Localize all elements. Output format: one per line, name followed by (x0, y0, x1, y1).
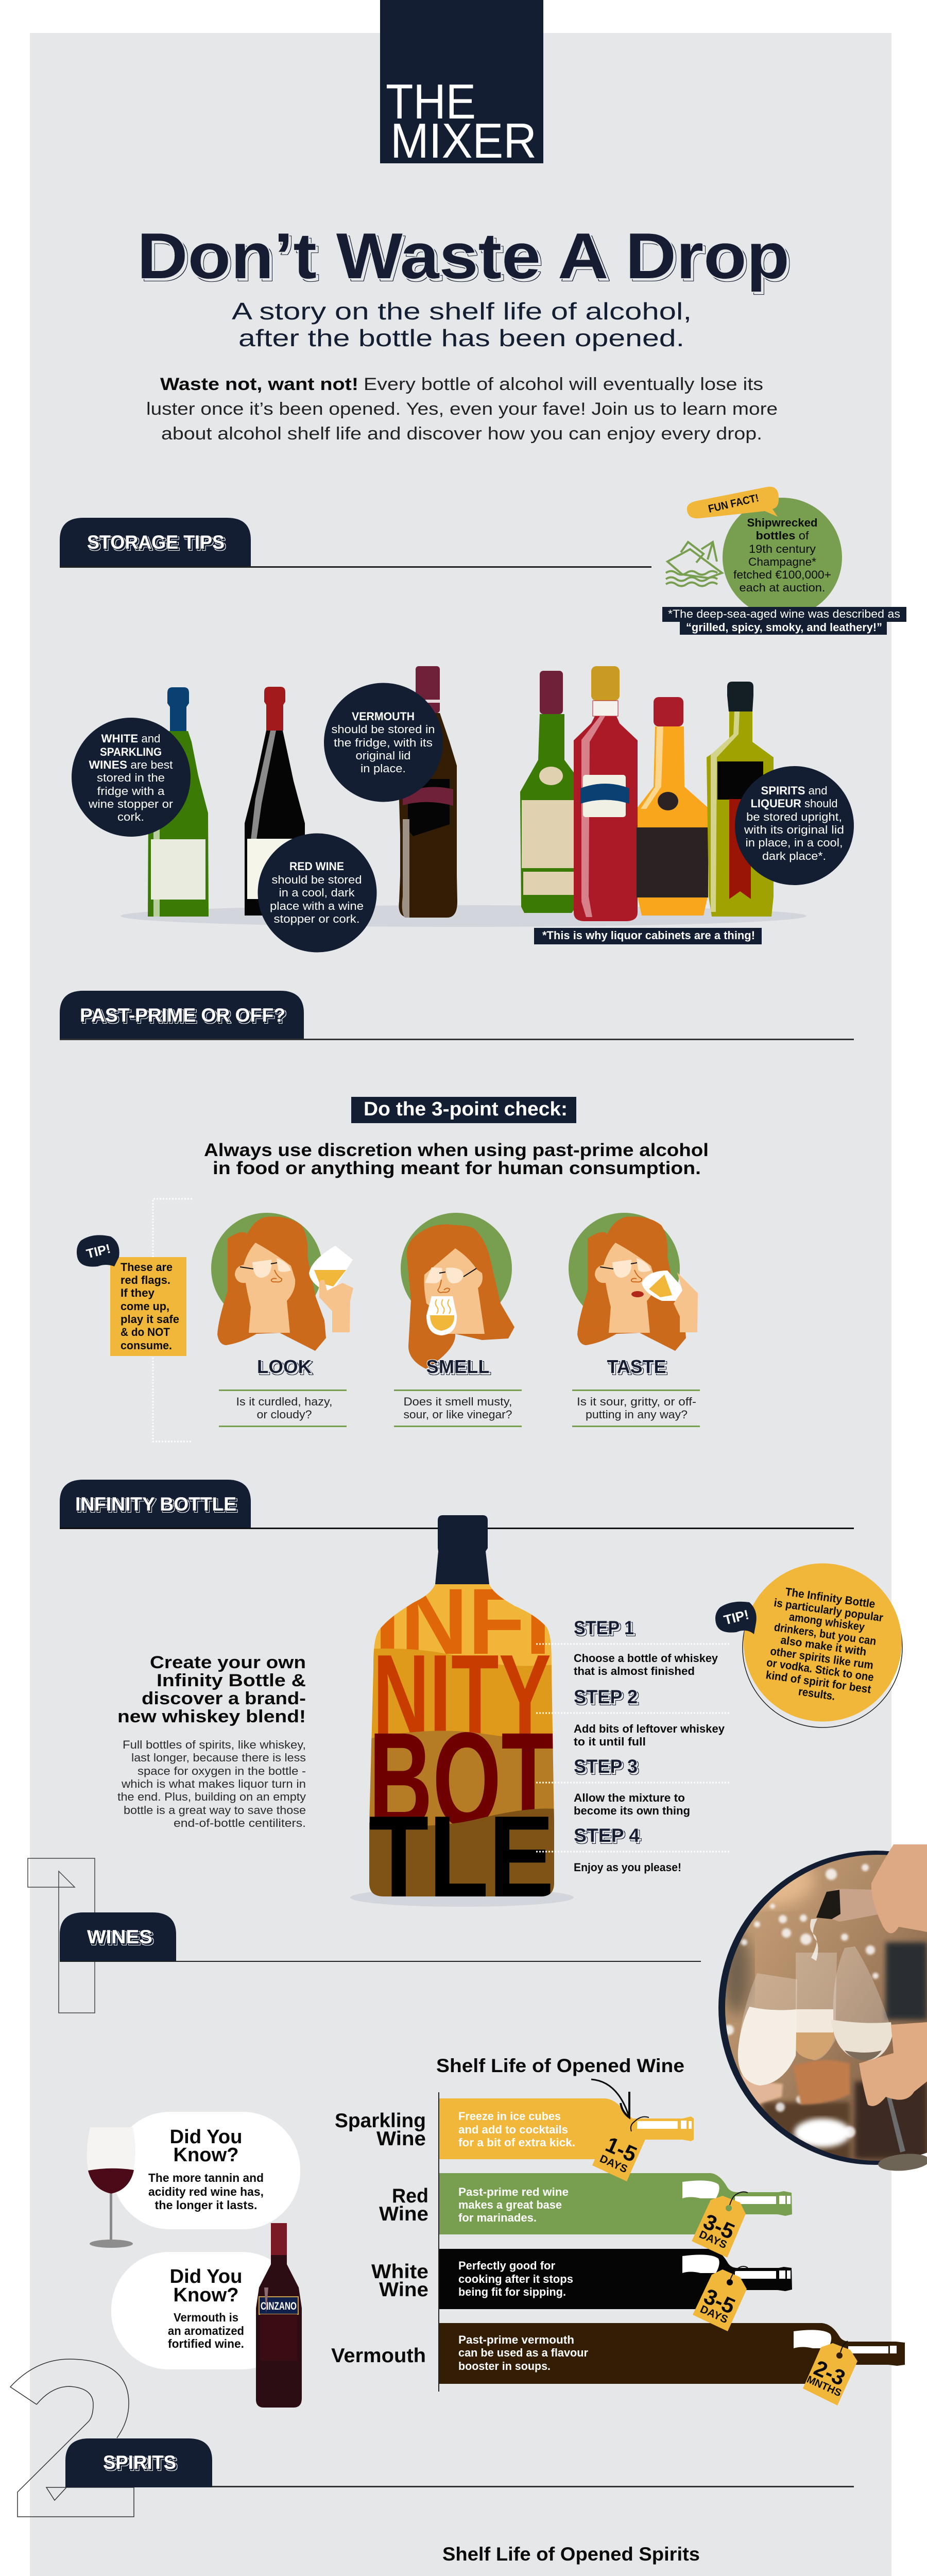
callout: vermouth: in place. (360, 762, 406, 775)
text: discretion note: Always use discretion when using past-prime alcohol (204, 1140, 709, 1160)
did you know: vermouth: Did You (170, 2266, 242, 2287)
text: create your own infinity bottle: space for oxygen in the bottle - (138, 1765, 306, 1777)
text: create your own infinity bottle: end-of-bottle centiliters. (174, 1817, 306, 1829)
check: smell: SMELL (426, 1356, 489, 1377)
tip circle: infinity bottle: or vodka. Stick to one (766, 1656, 874, 1684)
subtitle: A story on the shelf life of alcohol, (232, 298, 692, 325)
tip circle: infinity bottle (715, 1563, 902, 1727)
bottle shadow (350, 1888, 574, 1907)
section tab: infinity bottle (60, 1480, 854, 1529)
fun fact text: Champagne* (748, 555, 816, 568)
did you know: vermouth: Vermouth is (174, 2311, 238, 2324)
callout: spirits and liqueur: SPIRITS and (761, 784, 827, 797)
check: taste: TASTE (607, 1356, 666, 1377)
did you know: tannin (87, 2112, 300, 2248)
callout: spirits and liqueur (735, 766, 854, 885)
callout: spirits and liqueur: LIQUEUR should (751, 797, 837, 810)
callout: spirits and liqueur: in place, in a cool, (746, 836, 843, 849)
check: look: LOOK (257, 1356, 312, 1377)
tag: red wine 3-5 days: 3-5 (700, 2209, 738, 2244)
step 3: become its own thing (574, 1804, 690, 1817)
bar: vermouth: can be used as a flavour (458, 2346, 588, 2359)
tag: vermouth 2-3 months: MNTHS (805, 2374, 843, 2399)
callout: white and sparkling wines: cork. (117, 810, 144, 823)
bottle: orange liqueur (637, 697, 708, 916)
tip box: red flags: red flags. (121, 1274, 170, 1286)
bottle: white wine (148, 687, 209, 917)
section tab: spirits (65, 2438, 854, 2487)
bar: red wine (379, 2173, 792, 2234)
arrow: to sparkling tag (591, 2079, 629, 2117)
check: taste (572, 1356, 700, 1427)
hand: top right with bottle (816, 1844, 927, 1933)
text: create your own infinity bottle: the end. Plus, building on an empty (117, 1790, 306, 1803)
step 1: Choose a bottle of whiskey (574, 1652, 718, 1665)
text: create your own infinity bottle: discover a brand- (142, 1689, 306, 1708)
chart title: wine: Shelf Life of Opened Wine (436, 2055, 684, 2076)
bottle: red wine (245, 687, 305, 916)
text: create your own infinity bottle: Infinity Bottle & (157, 1671, 306, 1690)
tip box: red flags (77, 1235, 186, 1356)
callout: vermouth (324, 683, 443, 802)
intro paragraph (146, 375, 778, 444)
step 1: that is almost finished (574, 1665, 695, 1677)
callout: spirits and liqueur: be stored upright, (746, 810, 842, 823)
did you know: tannin: the longer it lasts. (154, 2198, 258, 2212)
green circle (723, 498, 842, 617)
check: taste: putting in any way? (586, 1408, 688, 1421)
did you know: vermouth: Know? (173, 2284, 239, 2306)
bubble: tip (715, 1602, 757, 1634)
check: smell: sour, or like vinegar? (404, 1408, 512, 1421)
bottle: green liqueur (520, 671, 577, 913)
check: smell: Does it smell musty, (404, 1395, 512, 1408)
callout: red wine: should be stored (272, 873, 362, 886)
illustration: taste (569, 1213, 698, 1351)
logo: The Mixer: THE (386, 74, 476, 129)
logo: The Mixer: MIXER (390, 113, 537, 168)
illustration: infinity bottle: NITY (373, 1630, 551, 1760)
did you know: tannin: Did You (170, 2126, 242, 2148)
tag: white wine 3-5 days: 3-5 (700, 2284, 739, 2318)
check: look (219, 1356, 347, 1427)
bar: sparkling wine: Wine (376, 2128, 426, 2150)
bottle: red liqueur (574, 666, 638, 921)
bar: white wine: Wine (379, 2279, 428, 2301)
tip box: red flags: If they (121, 1286, 155, 1299)
callout: vermouth: original lid (355, 749, 411, 762)
did you know: tannin: Know? (173, 2144, 239, 2166)
logo: The Mixer (380, 0, 543, 168)
step 4: Enjoy as you please! (574, 1861, 681, 1874)
bar: white wine: White (371, 2261, 428, 2283)
glass foot (878, 2152, 927, 2173)
bottle: olive liqueur (707, 682, 774, 917)
bottles shelf shadow (121, 905, 806, 927)
fun fact text: Shipwrecked (747, 516, 818, 529)
step 1: STEP 1 (574, 1617, 634, 1638)
bar: vermouth: Past-prime vermouth (458, 2333, 574, 2346)
did you know: vermouth (111, 2223, 302, 2408)
tip box: red flags: These are (121, 1261, 173, 1274)
hands (793, 2060, 850, 2105)
illustration: row of bottles (148, 666, 774, 921)
callout: vermouth: the fridge, with its (334, 736, 433, 749)
step 2: Add bits of leftover whiskey (574, 1722, 725, 1735)
intro paragraph: Waste not, want not! (160, 375, 358, 394)
bar: sparkling wine: and add to cocktails (458, 2123, 568, 2136)
tip box: red flags: & do NOT (121, 1326, 170, 1338)
callout: white and sparkling wines: WINES are best (89, 758, 173, 771)
callout: spirits and liqueur: dark place*. (762, 850, 826, 862)
tag: vermouth 2-3 months: 2-3 (811, 2355, 849, 2391)
pill: fun fact (687, 487, 779, 518)
check: smell (394, 1356, 522, 1427)
bar: sparkling wine: Freeze in ice cubes (458, 2110, 561, 2123)
callout: white and sparkling wines: fridge with a (97, 785, 165, 798)
check: look: or cloudy? (256, 1408, 312, 1421)
tag: white wine 3-5 days (693, 2266, 748, 2331)
text: create your own infinity bottle: last longer, because there is less (131, 1751, 306, 1764)
tip circle: infinity bottle: among whiskey (788, 1610, 866, 1634)
tag: vermouth 2-3 months (803, 2341, 857, 2405)
tip circle: infinity bottle: The Infinity Bottle (784, 1585, 876, 1611)
text: create your own infinity bottle: Create your own (150, 1653, 306, 1672)
step 3 (536, 1756, 729, 1817)
tag: red wine 3-5 days (692, 2192, 748, 2258)
text: create your own infinity bottle (117, 1653, 306, 1829)
text: create your own infinity bottle: bottle is a great way to save those (124, 1804, 306, 1817)
tip circle: infinity bottle: other spirits like rum (769, 1645, 874, 1672)
icon: cinzano bottle (256, 2223, 302, 2408)
section tab: wines (60, 1912, 701, 1962)
step 1 (536, 1617, 729, 1677)
decorative outline number two (10, 2359, 134, 2517)
did you know: tannin: acidity red wine has, (148, 2185, 264, 2198)
callout: white and sparkling wines: stored in the (97, 771, 165, 784)
bar: white wine (371, 2249, 792, 2309)
illustration: look (211, 1213, 353, 1351)
note: deep sea wine: “grilled, spicy, smoky, and leathery!” (686, 621, 882, 634)
bar: vermouth: booster in soups. (458, 2360, 551, 2372)
glass: middle (796, 1953, 837, 2060)
hand: right (859, 2022, 927, 2106)
illustration: infinity bottle: INFI (374, 1569, 551, 1674)
bar: sparkling wine (335, 2098, 694, 2159)
dotted bracket (153, 1199, 192, 1442)
glass: right (833, 1946, 889, 2023)
section tab: wines: WINES (87, 1926, 152, 1947)
bar: vermouth (331, 2323, 905, 2384)
callout: white and sparkling wines (72, 718, 191, 837)
note: deep sea wine (662, 607, 906, 635)
step 2: to it until full (574, 1735, 646, 1748)
pill: fun fact: FUN FACT! (707, 492, 760, 515)
section tab: spirits: SPIRITS (103, 2452, 176, 2473)
note: deep sea wine: *The deep-sea-aged wine was described as (668, 607, 900, 620)
decorative outline number one (28, 1858, 95, 2013)
tag: 1-5 days: 1-5 (602, 2132, 641, 2167)
step 2: STEP 2 (574, 1686, 638, 1707)
tip circle: infinity bottle: kind of spirit for best (765, 1668, 872, 1696)
intro paragraph: about alcohol shelf life and discover how you can enjoy every drop. (161, 424, 762, 444)
bar: red wine: makes a great base (458, 2198, 562, 2211)
tip box: red flags: play it safe (121, 1313, 179, 1326)
fun fact text: 19th century (749, 543, 816, 555)
text: create your own infinity bottle: which is what makes liquor turn in (121, 1777, 306, 1790)
bar: white wine: Perfectly good for (458, 2259, 555, 2272)
subtitle (232, 298, 692, 351)
tip circle: infinity bottle: results. (798, 1685, 836, 1703)
tag: 1-5 days (592, 2117, 649, 2181)
callout: red wine: place with a wine (270, 900, 364, 912)
step 2 (536, 1686, 729, 1748)
text: discretion note: in food or anything meant for human consumption. (213, 1158, 701, 1178)
step 4: STEP 4 (574, 1825, 640, 1846)
tip circle: infinity bottle: also make it with (780, 1633, 867, 1658)
callout: red wine: in a cool, dark (279, 886, 355, 899)
callout: red wine: stopper or cork. (274, 912, 359, 925)
callout: red wine (258, 834, 377, 952)
intro paragraph: luster once it’s been opened. Yes, even your fave! Join us to learn more (146, 399, 778, 419)
chart title: spirits: Shelf Life of Opened Spirits (442, 2544, 700, 2565)
section tab: past-prime or off: PAST-PRIME OR OFF? (80, 1005, 285, 1026)
callout: white and sparkling wines: WHITE and (101, 732, 161, 745)
callout: red wine: RED WINE (289, 860, 344, 873)
bar: white wine: being fit for sipping. (458, 2285, 566, 2298)
fun fact callout (662, 487, 906, 635)
text: create your own infinity bottle: new whiskey blend! (117, 1707, 306, 1726)
illustration: infinity bottle: BOT (369, 1704, 555, 1855)
bar: red wine: Red (392, 2185, 428, 2207)
bar: red wine: Wine (379, 2203, 428, 2225)
fun fact text: fetched €100,000+ (733, 568, 831, 581)
bar: white wine: cooking after it stops (458, 2273, 573, 2285)
section tab: past-prime or off (60, 991, 854, 1040)
bubble: tip: TIP! (85, 1242, 112, 1261)
fun fact text (733, 516, 831, 594)
check: taste: Is it sour, gritty, or off- (577, 1395, 696, 1408)
icon: cinzano bottle: CINZANO (261, 2300, 297, 2312)
section tab: storage tips: STORAGE TIPS (87, 532, 225, 553)
did you know: vermouth: fortified wine. (168, 2337, 244, 2350)
tip box: red flags: come up, (121, 1300, 169, 1313)
section tab: storage tips (60, 518, 651, 568)
illustration: smell (401, 1213, 514, 1369)
did you know: vermouth: an aromatized (168, 2324, 244, 2337)
icon: shipwreck (666, 542, 722, 586)
tag: red wine 3-5 days: DAYS (697, 2228, 729, 2251)
step 4 (536, 1825, 729, 1874)
callout: white and sparkling wines: wine stopper or (88, 798, 173, 810)
subtitle: after the bottle has been opened. (238, 325, 684, 351)
tag: white wine 3-5 days: DAYS (698, 2303, 730, 2326)
intro paragraph: Every bottle of alcohol will eventually lose its (364, 375, 763, 394)
callout: white and sparkling wines: SPARKLING (100, 745, 162, 758)
photo: champagne toast (0, 1844, 927, 2576)
tip box: red flags: consume. (121, 1339, 172, 1352)
illustration: infinity bottle (369, 1515, 554, 1896)
tip circle: infinity bottle: is particularly popular (773, 1596, 884, 1624)
callout: vermouth: should be stored in (332, 723, 435, 736)
bar: vermouth: Vermouth (331, 2345, 426, 2367)
fun fact text: each at auction. (740, 581, 825, 594)
step 3: Allow the mixture to (574, 1791, 685, 1804)
bar: red wine: for marinades. (458, 2211, 537, 2224)
bubble: tip (77, 1235, 119, 1267)
heading: three point check: Do the 3-point check: (364, 1098, 568, 1120)
chart axis (438, 2092, 439, 2392)
illustration: infinity bottle: TLE (369, 1791, 554, 1921)
check: look: Is it curdled, hazy, (236, 1395, 333, 1408)
glass: left (738, 1973, 797, 2086)
bar: red wine: Past-prime red wine (458, 2185, 569, 2198)
did you know: tannin: The more tannin and (148, 2171, 264, 2184)
callout: vermouth: VERMOUTH (352, 710, 415, 723)
bar: sparkling wine: for a bit of extra kick. (458, 2136, 575, 2149)
note: liquor cabinets: *This is why liquor cabinets are a thing! (542, 929, 755, 942)
callout: spirits and liqueur: with its original lid (744, 823, 844, 836)
section tab: infinity bottle: INFINITY BOTTLE (75, 1494, 236, 1515)
bottle: vermouth (398, 666, 457, 918)
text: create your own infinity bottle: Full bottles of spirits, like whiskey, (123, 1738, 306, 1751)
fun fact text: bottles of (756, 529, 809, 542)
icon: red wine glass (87, 2127, 135, 2248)
bar: sparkling wine: Sparkling (335, 2110, 426, 2132)
title: Don’t Waste A Drop (137, 219, 789, 292)
tag: 1-5 days: DAYS (598, 2153, 629, 2175)
tip circle: infinity bottle: drinkers, but you can (774, 1620, 877, 1648)
step 3: STEP 3 (574, 1756, 638, 1777)
text: discretion note (204, 1140, 709, 1178)
bubble: tip: TIP! (722, 1607, 750, 1628)
